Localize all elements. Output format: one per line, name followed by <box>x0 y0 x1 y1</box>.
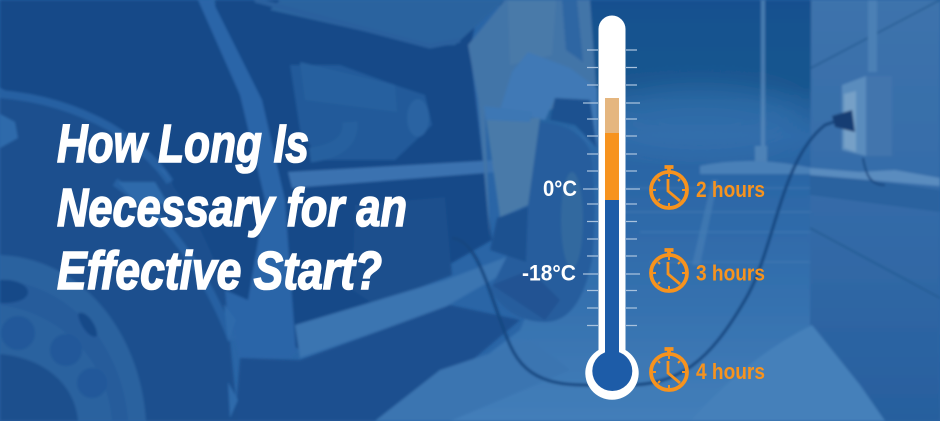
icon: stopwatch 2 hours <box>651 167 687 208</box>
snowy ground <box>400 165 815 421</box>
front wheel rim <box>561 172 583 268</box>
snow clumps <box>0 114 238 418</box>
rear tire <box>0 90 238 421</box>
icon: stopwatch 3 hours <box>651 250 687 291</box>
hood underside <box>270 0 505 46</box>
snow drift <box>690 325 885 421</box>
building wall <box>810 0 940 421</box>
temperature label -18°C: -18°C <box>522 260 576 286</box>
bulb fill <box>592 351 632 391</box>
tire snow edge <box>0 94 232 340</box>
under cab <box>490 207 528 262</box>
snow on ledge <box>810 168 940 186</box>
icon: stopwatch 4 hours <box>651 349 687 390</box>
parking lot stripes <box>590 188 812 262</box>
label 2 hours: 2 hours <box>696 177 765 202</box>
blue level <box>605 200 619 360</box>
hood inner edge <box>255 0 460 46</box>
label 4 hours: 4 hours <box>696 359 765 384</box>
wall ledge shadow <box>810 172 940 212</box>
fender step top <box>484 106 532 122</box>
temperature label 0°C: 0°C <box>543 176 577 201</box>
wall block lines <box>810 0 940 298</box>
rear fender inner <box>0 0 265 300</box>
light orange level <box>605 98 619 133</box>
snow bank <box>700 161 812 174</box>
tick marks <box>583 50 640 326</box>
grille <box>562 0 583 62</box>
wheel rim <box>0 255 146 421</box>
intake pipe <box>310 122 350 155</box>
engine pulley <box>407 99 429 137</box>
rim disc <box>0 305 112 421</box>
wheel bolts <box>1 316 107 398</box>
title line 1: How Long Is <box>57 114 309 174</box>
plug <box>832 110 855 132</box>
thermometer tube and bulb outline <box>585 15 639 400</box>
cab side <box>468 0 596 240</box>
front tire <box>490 122 595 322</box>
title line 3: Effective Start? <box>57 241 382 301</box>
night sky <box>500 0 820 170</box>
orange level <box>605 133 619 200</box>
title <box>57 114 407 301</box>
shadow under truck <box>235 305 520 421</box>
wheel hub <box>0 354 78 421</box>
rear fender band <box>0 0 296 358</box>
thermometer <box>583 15 640 400</box>
wheel arch <box>550 98 597 148</box>
conduit pipe <box>868 0 877 72</box>
lower step <box>295 250 527 358</box>
outlet box <box>842 76 892 156</box>
wall cable <box>863 158 885 185</box>
running board bar <box>288 160 498 188</box>
battery box <box>352 197 452 305</box>
cab door panel <box>508 0 556 65</box>
engine block <box>290 65 432 160</box>
power cable <box>452 118 845 385</box>
haze above parking lot <box>595 86 805 158</box>
wheel holes <box>0 280 97 337</box>
mud flap <box>486 118 540 217</box>
rim inner ring <box>0 280 128 421</box>
lamp post <box>755 0 767 165</box>
label 3 hours: 3 hours <box>696 260 765 286</box>
cab fender <box>488 52 597 150</box>
snow patch <box>375 340 570 421</box>
painted lot line <box>692 180 718 265</box>
title line 2: Necessary for an <box>57 178 407 238</box>
engine bay <box>215 0 492 350</box>
engine valve cover <box>300 62 397 112</box>
tire tread <box>492 270 560 320</box>
